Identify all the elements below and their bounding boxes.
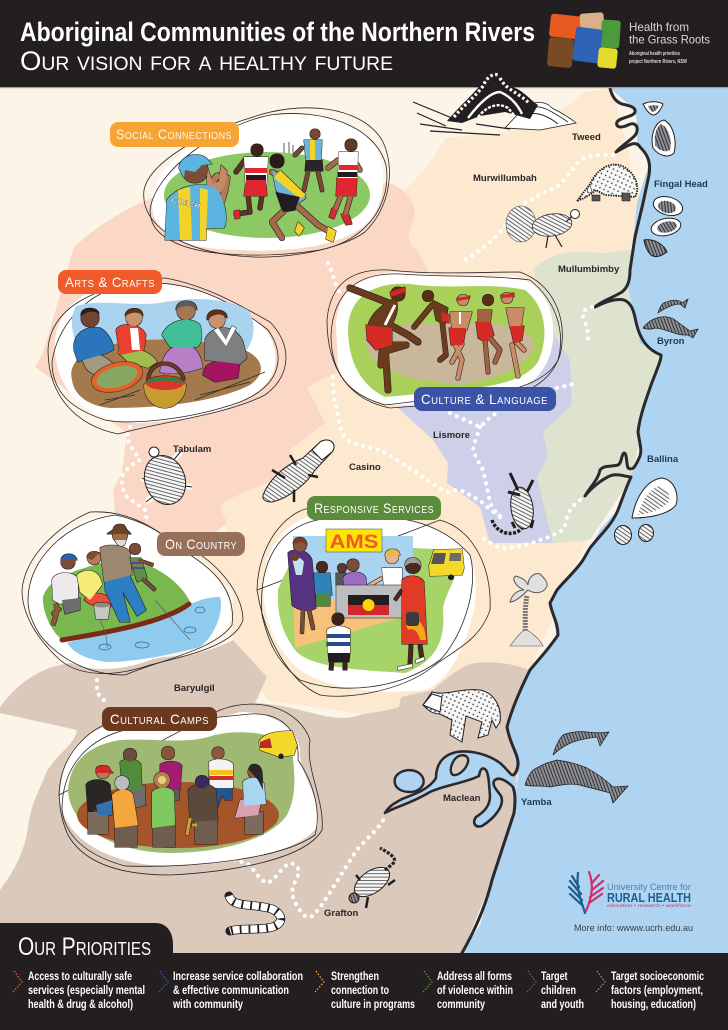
icons: Fingal Head shells: [643, 102, 685, 257]
person: child in stripes: [130, 544, 155, 590]
place names: Casino: [349, 462, 381, 473]
person: striped shirt: [209, 747, 233, 812]
runner: top: [295, 129, 323, 190]
place names: [173, 132, 708, 919]
icon: platypus: [263, 440, 334, 502]
island: [451, 755, 468, 775]
label: on country: On Country: [165, 536, 237, 552]
priority: culture: [315, 969, 415, 1011]
clinic sign: AMS: [330, 532, 378, 553]
crafter: blue jumper: [74, 308, 118, 375]
runner: red and white right: [328, 139, 360, 225]
dancer: fifth: [501, 292, 524, 376]
minibus: [429, 549, 464, 580]
runner: centre: [270, 154, 336, 242]
priority: violence: [423, 969, 513, 1011]
priority: socioeconomic: [596, 969, 704, 1011]
icon: goanna south: [349, 848, 395, 908]
label: arts and crafts: Arts & Crafts: [65, 274, 155, 290]
seated woman: [343, 559, 367, 590]
place names: Byron: [657, 336, 685, 347]
label: culture and language: Culture & Language: [421, 391, 548, 407]
minibus: [259, 731, 297, 758]
priority: access: services (especially mental: [28, 983, 145, 997]
place names: Fingal Head: [654, 179, 708, 190]
priority: violence: Address all forms: [437, 969, 512, 983]
priority: children: Target: [541, 969, 568, 983]
icons: Yamba dolphins: [525, 732, 628, 803]
lake: [395, 770, 424, 792]
reeds: [100, 372, 265, 405]
label: social connections: [110, 122, 239, 147]
logo text: project Northern Rivers, NSW: [629, 59, 687, 65]
label: culture and language: [414, 387, 556, 411]
icon: echidna: [577, 165, 637, 201]
coach shirt text: COACH: [171, 195, 201, 211]
person: bright green: [152, 772, 175, 847]
woman in red dress: [395, 558, 427, 670]
priority: culture: culture in programs: [331, 997, 415, 1011]
icon: brush turkey: [506, 206, 580, 248]
river delta: Maclean and Yamba: [385, 751, 518, 826]
logo: coloured tiles: [547, 12, 621, 69]
logo: University Centre for Rural Health: [569, 872, 693, 934]
woven basket: handled: [144, 364, 186, 408]
priority: collaboration: with community: [172, 997, 243, 1011]
dotted travel paths: [97, 155, 613, 917]
priority: access: Access to culturally safe: [28, 969, 132, 983]
panel: arts and crafts: [48, 270, 286, 434]
panel: our priorities: [0, 923, 728, 1030]
header band: [0, 0, 728, 88]
priority: collaboration: Increase service collaboration: [173, 969, 303, 983]
nurse: [368, 549, 402, 587]
runner: red and white left: [234, 144, 268, 219]
woman holding baby: [288, 537, 316, 632]
dancer: second: [414, 290, 449, 360]
label: responsive services: [307, 496, 441, 520]
dancer: main: [350, 287, 418, 390]
panel: social connections: [110, 108, 389, 257]
title: Aboriginal Communities of the Northern Rivers: [20, 17, 535, 47]
icon: pandanus palm: [510, 574, 547, 646]
panel: culture and language: [327, 270, 562, 411]
person: red cap: [86, 766, 113, 834]
clinic sign: [326, 529, 382, 553]
coastline: [462, 88, 661, 953]
place names: Ballina: [647, 454, 679, 465]
person: boy with blue cap: [52, 554, 80, 625]
panel: on country: [22, 512, 245, 675]
logo: University Centre for Rural Health: More info: wwww.ucrh.edu.au: [574, 923, 693, 934]
person: brown back: [187, 776, 218, 844]
priority: violence: of violence within: [437, 983, 513, 997]
subtitle: Our vision for a healthy future: [20, 46, 393, 76]
heading: Our Priorities: [18, 933, 151, 961]
icon: goanna: [492, 473, 536, 533]
priority: children: [527, 969, 584, 1011]
crafter: grey jumper: [203, 310, 247, 382]
place names: Murwillumbah: [473, 173, 537, 184]
person: magenta top: [160, 746, 182, 800]
person: woman in yellow: [77, 552, 114, 610]
crafter: red cardigan: [116, 308, 157, 368]
person: bucket: [94, 602, 110, 619]
priority: violence: community: [437, 997, 485, 1011]
icon: wallaby: [423, 690, 500, 742]
panel: cultural camps: [59, 704, 322, 875]
label: responsive services: Responsive Services: [314, 500, 434, 516]
priority: access: health & drug & alcohol): [28, 997, 133, 1011]
priority: children: and youth: [541, 997, 584, 1011]
label: cultural camps: Cultural Camps: [110, 711, 209, 727]
icon: turtle: [138, 447, 192, 510]
woven basket: green: [88, 357, 146, 397]
logo text: Health from: [629, 20, 689, 34]
priority: access: [13, 969, 145, 1011]
desk and flag: [336, 585, 403, 618]
dancer: fourth: [476, 294, 500, 372]
dancer: third: [449, 294, 472, 378]
logo: University Centre for Rural Health: education • research • workforce: [607, 903, 692, 908]
person: grey hair orange shirt: [112, 776, 138, 847]
logo: University Centre for Rural Health: RURAL HEALTH: [607, 890, 691, 905]
icon: mountains: [413, 69, 576, 135]
place names: Mullumbimby: [558, 264, 620, 275]
label: arts and crafts: [58, 270, 162, 294]
label: cultural camps: [102, 707, 217, 731]
person: man in hat: [100, 524, 146, 622]
priority: culture: Strengthen: [331, 969, 379, 983]
logo text: Aboriginal health priorities: [629, 51, 680, 57]
icons: Ballina oyster shells: [614, 478, 677, 544]
boy in striped top: [327, 613, 350, 670]
person: light blue: [235, 764, 266, 834]
place names: Baryulgil: [174, 683, 215, 694]
place names: Lismore: [433, 430, 470, 441]
priority: socioeconomic: housing, education): [611, 997, 696, 1011]
label: on country: [157, 532, 245, 556]
priority: children: children: [541, 983, 576, 997]
logo text: [629, 20, 710, 65]
crafter: teal top: [160, 301, 202, 374]
place names: Tweed: [572, 132, 601, 143]
tree icon: [569, 872, 603, 913]
label: social connections: Social Connections: [116, 126, 232, 142]
icon: eel: [229, 896, 281, 931]
priority: culture: connection to: [331, 983, 389, 997]
priority: collaboration: & effective communication: [173, 983, 289, 997]
logo text: the Grass Roots: [629, 32, 710, 46]
place names: Yamba: [521, 797, 552, 808]
place names: Grafton: [324, 908, 358, 919]
place names: Maclean: [443, 793, 481, 804]
seated man and child: [314, 562, 346, 606]
priority: collaboration: [159, 969, 303, 1011]
coach: [165, 155, 227, 240]
panel: responsive services: [257, 496, 490, 696]
person: green top: [120, 748, 145, 808]
logo: University Centre for Rural Health: University Centre for: [607, 882, 691, 893]
place names: Tabulam: [173, 444, 211, 455]
icons: Byron dolphins: [643, 299, 698, 338]
